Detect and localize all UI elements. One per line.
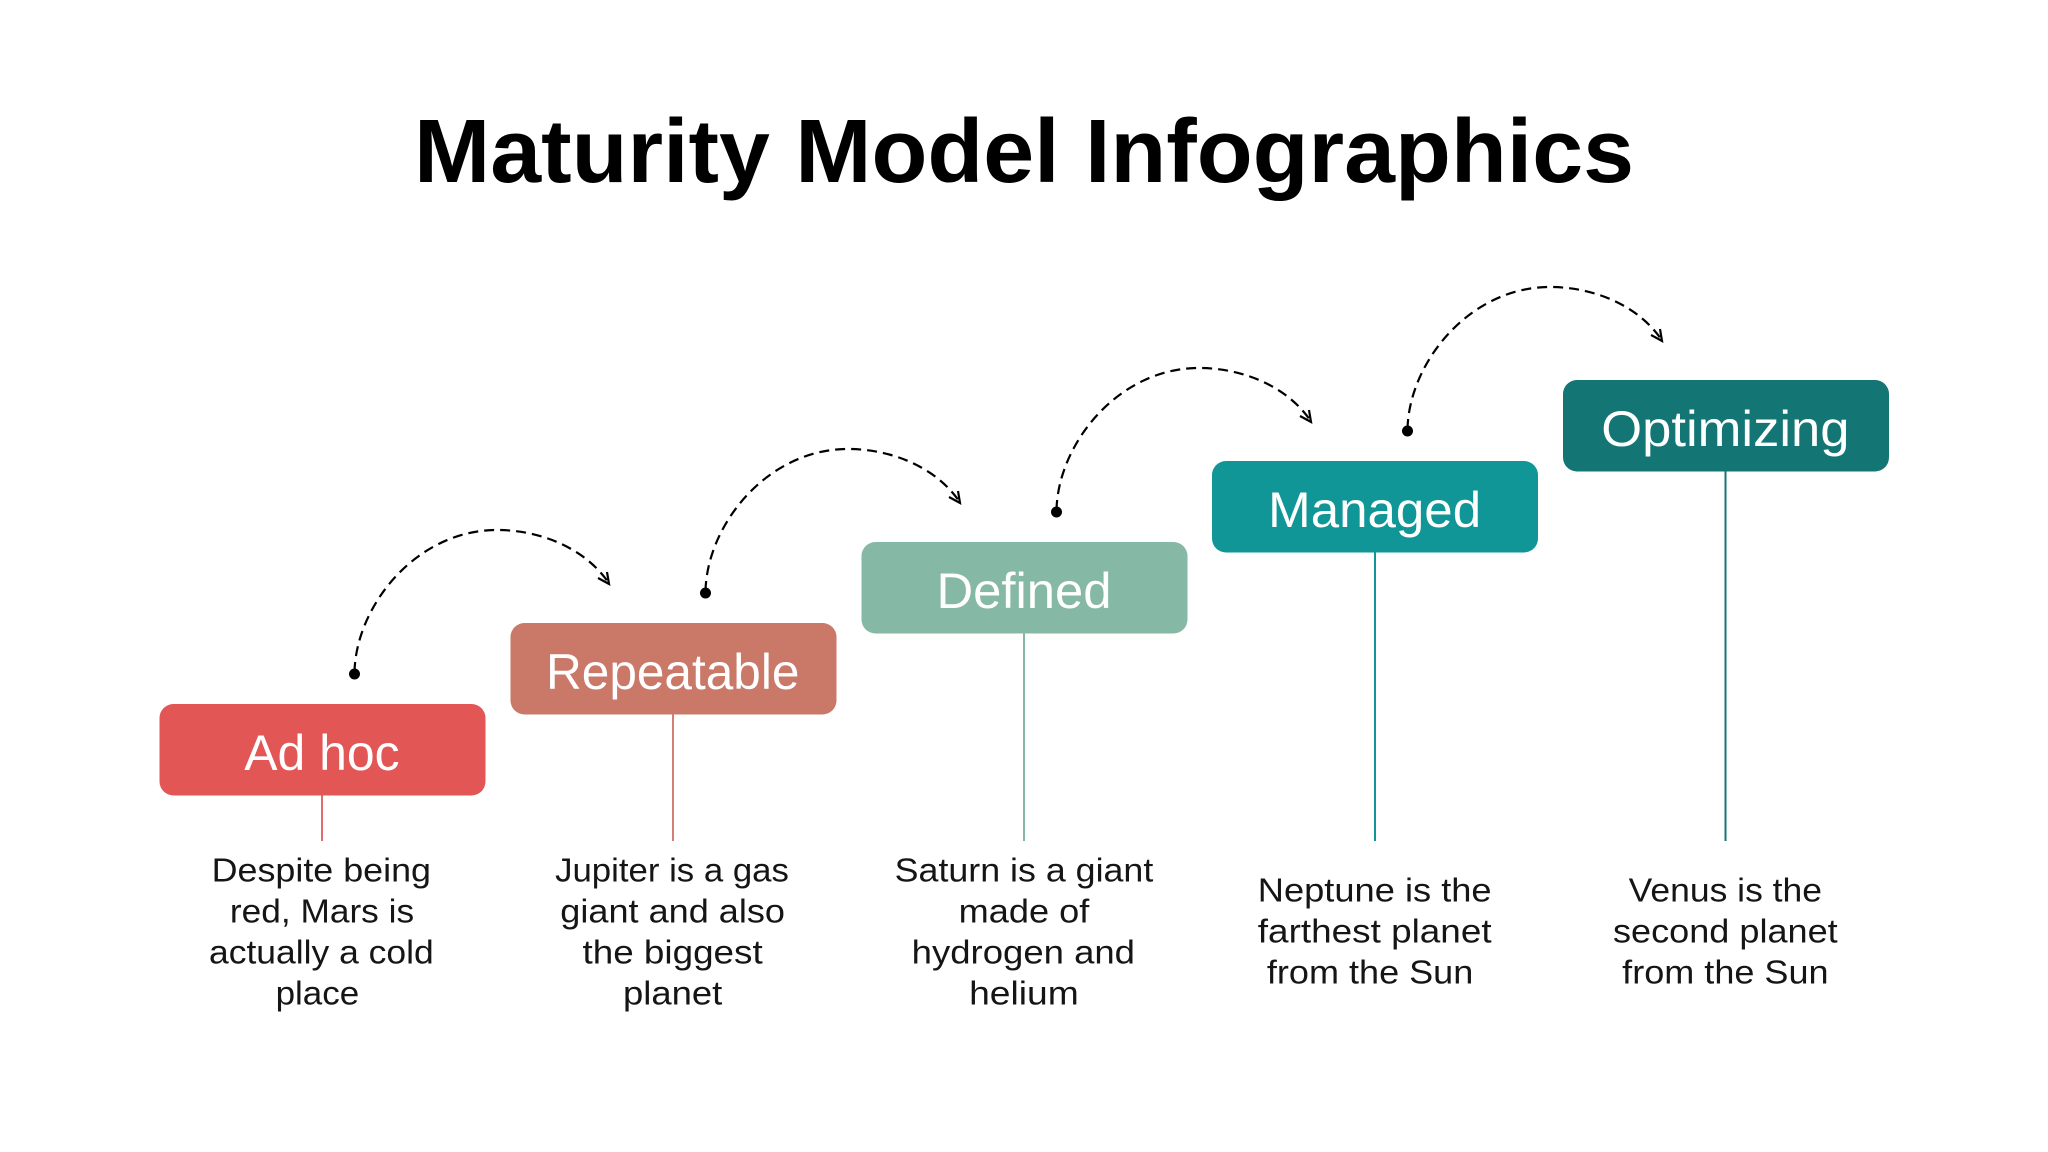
description: Jupiter: giant and also	[560, 892, 785, 930]
description: Saturn: made of	[959, 892, 1090, 930]
connector line 2	[672, 714, 674, 841]
description: Saturn	[895, 852, 1153, 1012]
description: Jupiter: the biggest	[582, 934, 763, 970]
description: Venus: from the Sun	[1622, 954, 1829, 990]
connector line 4	[1374, 552, 1376, 841]
arrow: Repeatable to Defined	[700, 449, 960, 598]
step 2: Repeatable	[510, 623, 836, 1012]
description: Mars: Despite being	[212, 852, 431, 888]
description: Mars	[209, 852, 434, 1012]
label box: Defined: Defined	[936, 563, 1112, 619]
step 5: Optimizing	[1563, 380, 1889, 990]
label box: Repeatable: Repeatable	[546, 644, 799, 700]
description: Neptune: Neptune is the	[1258, 872, 1492, 908]
description: Jupiter: Jupiter is a gas	[555, 852, 789, 888]
arrow: Managed to Optimizing	[1402, 287, 1662, 436]
description: Venus	[1613, 872, 1838, 990]
description: Neptune	[1258, 872, 1492, 990]
description: Neptune: farthest planet	[1258, 912, 1492, 950]
label box: Optimizing: Optimizing	[1601, 401, 1850, 457]
description: Neptune: from the Sun	[1267, 954, 1473, 990]
description: Venus: Venus is the	[1629, 872, 1822, 908]
arrow: Defined to Managed	[1051, 368, 1311, 518]
step 3: Defined	[862, 542, 1188, 1012]
connector line 1	[321, 795, 323, 841]
description: Saturn: Saturn is a giant	[895, 852, 1153, 888]
arrow: Ad hoc to Repeatable	[349, 530, 609, 680]
description: Mars: place	[276, 974, 359, 1012]
description: Jupiter: planet	[623, 974, 722, 1012]
description: Saturn: hydrogen and	[912, 934, 1135, 970]
step 1: Ad hoc	[160, 704, 486, 1012]
label box: Managed	[1212, 461, 1538, 552]
description: Mars: red, Mars is	[230, 892, 414, 930]
label box: Managed: Managed	[1268, 482, 1481, 538]
label box: Ad hoc	[160, 704, 486, 796]
connector line 3	[1023, 633, 1025, 841]
connector line 5	[1724, 471, 1726, 841]
description: Mars: actually a cold	[209, 934, 434, 970]
label box: Repeatable	[510, 623, 836, 714]
step 4: Managed	[1212, 461, 1538, 990]
description: Jupiter	[555, 852, 789, 1012]
title: Maturity Model Infographics	[414, 102, 1634, 202]
label box: Defined	[862, 542, 1188, 634]
description: Venus: second planet	[1613, 912, 1838, 950]
description: Saturn: helium	[969, 974, 1079, 1012]
label box: Optimizing	[1563, 380, 1889, 472]
label box: Ad hoc: Ad hoc	[244, 725, 400, 781]
